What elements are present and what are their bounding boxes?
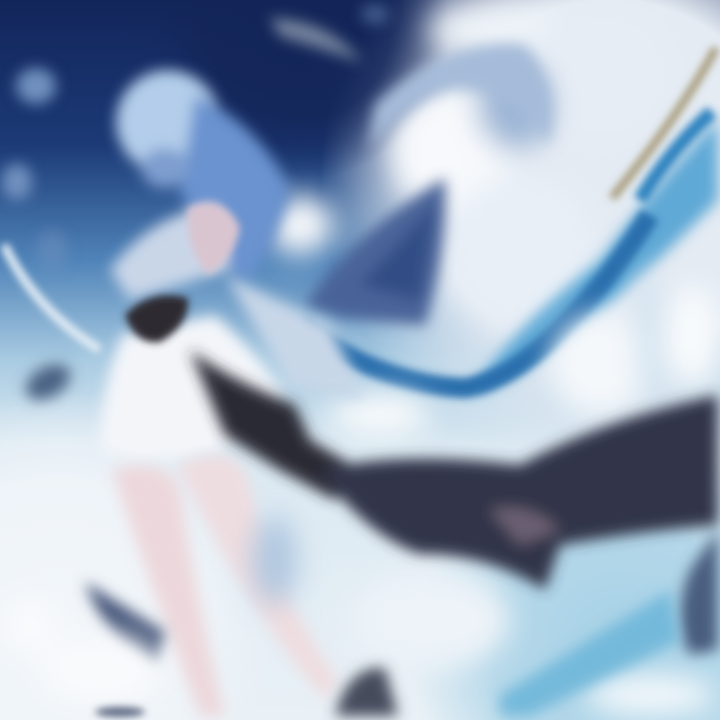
ribbon: pale blue sweep xyxy=(470,120,718,395)
ribbon: blue sweeping band xyxy=(300,112,712,388)
flowing hair wisp: top centre xyxy=(270,18,551,150)
stars: blurred bokeh xyxy=(2,4,389,270)
clouds: right of ribbon xyxy=(330,270,718,437)
hair: main head mass xyxy=(110,70,290,300)
dark sash: from waist across xyxy=(190,350,718,655)
shadow: bottom edge xyxy=(95,707,145,717)
dark fragment: lower left xyxy=(85,582,165,662)
clouds: upper right xyxy=(265,2,675,325)
figure: white dress body xyxy=(100,275,365,460)
clouds: lower centre xyxy=(2,515,715,717)
light crescent: left arc xyxy=(4,245,100,350)
figure: legs xyxy=(112,455,338,716)
ribbon: gold edge xyxy=(612,48,716,198)
boot: dark shoe xyxy=(335,668,398,716)
figure: dark belt xyxy=(125,295,188,342)
blue ribbon: lower right xyxy=(500,590,680,716)
figure: arm and shoulder xyxy=(188,203,240,275)
dark triangular cloak xyxy=(305,178,445,325)
small dark shard: left xyxy=(20,357,76,407)
